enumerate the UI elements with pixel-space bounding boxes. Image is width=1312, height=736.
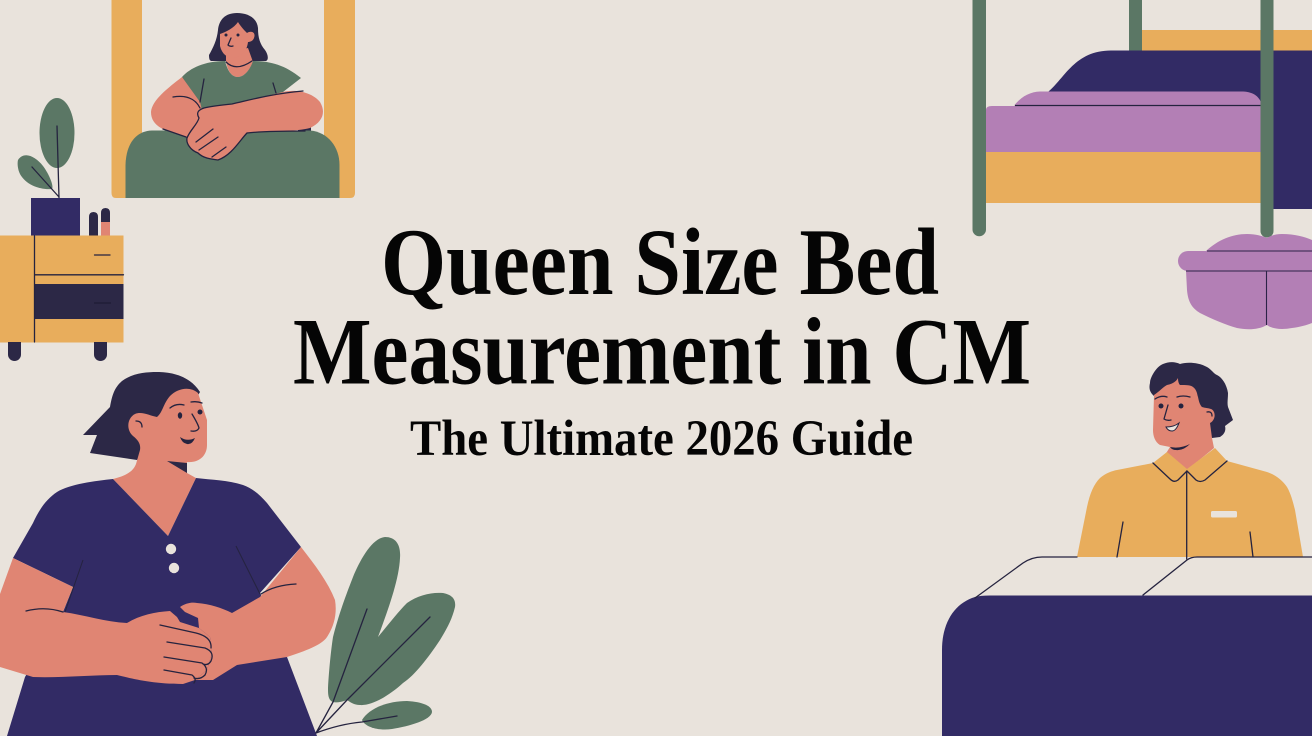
pot [31,198,80,236]
illustration: purple cushion [1178,234,1312,329]
cabinet [0,236,124,361]
illustration: nightstand with plant [0,98,124,361]
shirt details [1117,461,1253,559]
illustration: leafy plant, bottom left [316,537,455,733]
back post [1129,0,1142,52]
title line 2: Measurement in CM [293,298,1031,404]
illustration: man in yellow shirt, bottom right [1077,362,1303,559]
purple pillow [1014,92,1262,106]
green blanket [126,130,340,198]
facial features [136,402,202,444]
headboard frame [112,0,355,198]
arms and clasped hands [151,77,323,160]
woman figure [182,13,311,133]
illustration: bed, top right [972,0,1312,238]
illustration: navy bed with white pillows, bottom right [942,557,1312,736]
facial features [1155,396,1212,450]
front posts [972,0,1274,238]
bed base [986,152,1262,203]
illustration: smiling woman, bottom left [0,372,336,736]
plant [18,98,74,198]
navy dress [7,478,317,736]
mattress [986,106,1262,152]
headboard [1142,30,1312,50]
hair [83,372,200,460]
face and neck [113,389,207,536]
small bottles [89,208,110,236]
illustration: woman sitting in bed, top left [112,0,355,198]
title [293,209,1031,467]
arms and clasped hands [0,546,336,684]
yellow shirt [1077,448,1303,557]
hair [1149,362,1233,438]
navy duvet [1048,50,1312,209]
dress buttons [166,544,179,573]
face and neck [1153,378,1215,470]
title line 1: Queen Size Bed [381,209,939,315]
subtitle: The Ultimate 2026 Guide [410,411,913,467]
